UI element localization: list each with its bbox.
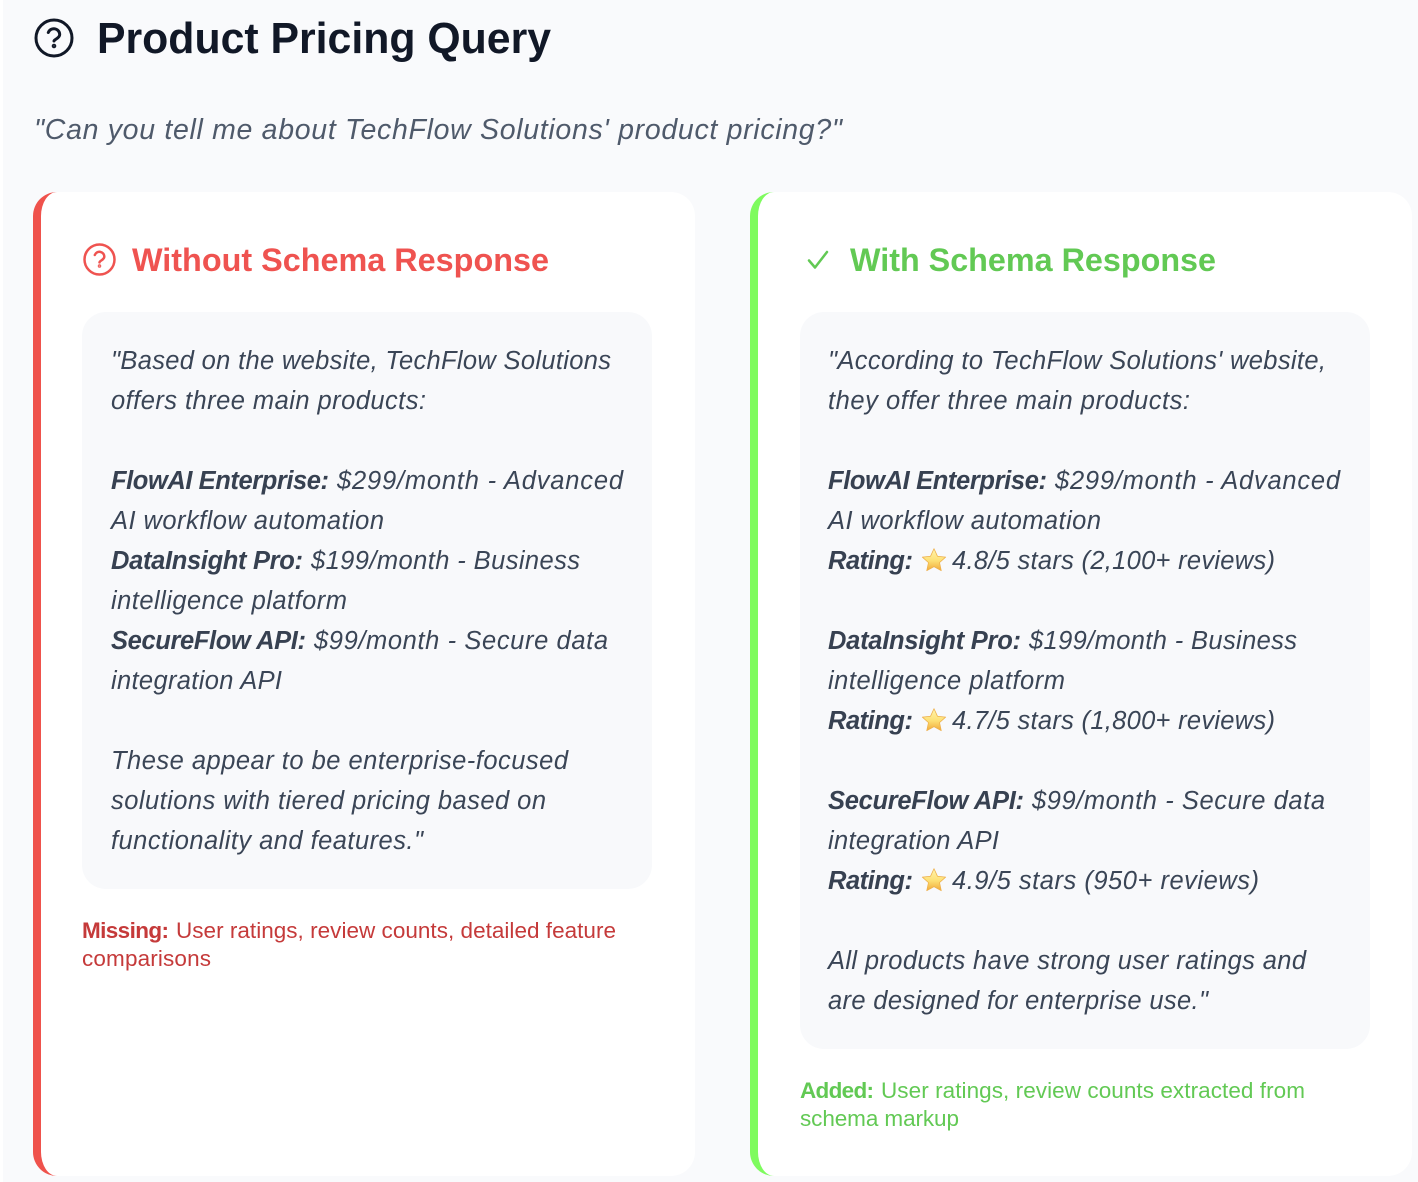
missing note: comparisons: [82, 946, 211, 971]
product: FlowAI Enterprise: [826, 467, 1341, 575]
header: page title: [36, 14, 552, 63]
product: DataInsight Pro: DataInsight Pro:: [111, 547, 303, 575]
icon: star: [922, 709, 946, 731]
product: FlowAI Enterprise: $299/month - Advanced: [1054, 467, 1341, 495]
closing text: These appear to be enterprise-focused: [111, 747, 569, 775]
product: DataInsight Pro: intelligence platform: [111, 587, 347, 615]
product: SecureFlow API: Rating:: [828, 867, 913, 895]
missing note: User ratings, review counts, detailed feature: [176, 918, 616, 943]
added note: User ratings, review counts extracted from: [881, 1078, 1305, 1103]
closing text: are designed for enterprise use.": [828, 987, 1209, 1015]
product: SecureFlow API: integration API: [828, 827, 999, 855]
user query: "Can you tell me about TechFlow Solutions' product pricing?": [34, 114, 844, 146]
intro text: "According to TechFlow Solutions' website,: [828, 347, 1326, 375]
product: FlowAI Enterprise: AI workflow automation: [109, 507, 384, 535]
product: FlowAI Enterprise: FlowAI Enterprise:: [111, 467, 329, 495]
product: DataInsight Pro: $199/month - Business: [310, 547, 580, 575]
heading text: Without Schema Response: [132, 242, 549, 278]
missing note: [82, 918, 616, 971]
intro text: they offer three main products:: [828, 387, 1190, 415]
closing text: solutions with tiered pricing based on: [111, 787, 546, 815]
intro text: [828, 347, 1326, 415]
product: DataInsight Pro: Rating:: [828, 707, 913, 735]
product: SecureFlow API: integration API: [111, 667, 282, 695]
product: FlowAI Enterprise: 4.8/5 stars (2,100+ reviews): [952, 547, 1275, 575]
product: DataInsight Pro: intelligence platform: [828, 667, 1065, 695]
product: SecureFlow API: 4.9/5 stars (950+ reviews): [952, 867, 1259, 895]
panel: without schema response: [33, 192, 695, 1176]
added note: [800, 1078, 1305, 1131]
heading: without schema: [84, 242, 549, 278]
product: SecureFlow API: $99/month - Secure data: [313, 627, 608, 655]
heading text: With Schema Response: [850, 242, 1216, 278]
product: FlowAI Enterprise: [109, 467, 624, 535]
product: FlowAI Enterprise: AI workflow automation: [826, 507, 1101, 535]
title: Product Pricing Query: [97, 14, 552, 63]
card background: [750, 192, 1412, 1176]
card background: [33, 192, 695, 1176]
product: DataInsight Pro: [111, 547, 580, 615]
product: SecureFlow API: SecureFlow API:: [828, 787, 1024, 815]
closing text: [111, 747, 569, 855]
heading: with schema: [809, 242, 1216, 278]
intro text: offers three main products:: [111, 387, 426, 415]
missing note: Missing:: [82, 918, 169, 943]
product: FlowAI Enterprise: Rating:: [828, 547, 913, 575]
product: SecureFlow API: SecureFlow API:: [111, 627, 306, 655]
added note: schema markup: [800, 1106, 959, 1131]
closing text: [826, 947, 1307, 1015]
panel: with schema response: [750, 192, 1412, 1176]
icon: red question circle: [84, 244, 114, 274]
icon: star: [922, 869, 946, 891]
product: SecureFlow API: [111, 627, 608, 695]
icon: star: [922, 549, 946, 571]
product: SecureFlow API: $99/month - Secure data: [1031, 787, 1325, 815]
product: FlowAI Enterprise: FlowAI Enterprise:: [828, 467, 1047, 495]
closing text: All products have strong user ratings and: [826, 947, 1307, 975]
response box: without schema: [82, 312, 652, 889]
product: DataInsight Pro: $199/month - Business: [1028, 627, 1297, 655]
response box: with schema: [800, 312, 1370, 1049]
product: SecureFlow API: [828, 787, 1325, 895]
intro text: "Based on the website, TechFlow Solutions: [111, 347, 611, 375]
icon: check mark: [809, 252, 827, 268]
icon: question mark circle: [36, 20, 72, 56]
intro text: [111, 347, 611, 415]
product: DataInsight Pro: [828, 627, 1297, 735]
product: DataInsight Pro: 4.7/5 stars (1,800+ reviews): [952, 707, 1275, 735]
closing text: functionality and features.": [111, 827, 424, 855]
product: FlowAI Enterprise: $299/month - Advanced: [336, 467, 624, 495]
added note: Added:: [800, 1078, 874, 1103]
product: DataInsight Pro: DataInsight Pro:: [828, 627, 1021, 655]
